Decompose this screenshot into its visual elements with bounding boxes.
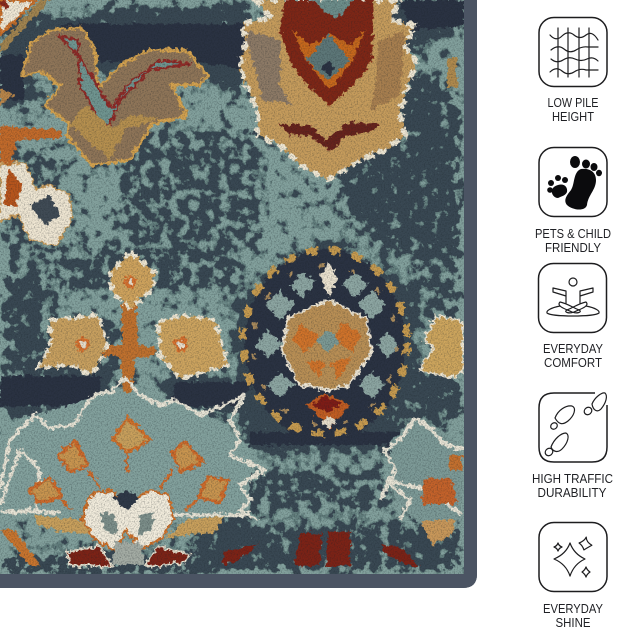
panel: pets and child friendly (535, 148, 611, 255)
motif: left orange stem and ivory flower (0, 88, 72, 246)
icon: low pile (539, 18, 607, 86)
label: FRIENDLY (545, 241, 602, 255)
label: DURABILITY (538, 486, 607, 500)
border stitching clean edge (0, 0, 477, 588)
motif: top left ivory corner (0, 0, 50, 55)
pale panel right lower (390, 420, 462, 525)
motif: central cross bloom (38, 252, 228, 392)
clean pale field bottom (0, 385, 255, 530)
rug pile grain (0, 0, 464, 574)
label: COMFORT (544, 356, 602, 370)
label: HEIGHT (552, 110, 594, 124)
icon: paw and foot prints (539, 148, 607, 216)
motif: right edge bloom (420, 316, 463, 378)
motif: small gold mark (447, 58, 458, 88)
motif: round medallion (243, 249, 407, 441)
motif: lower right orange bloom (420, 455, 462, 545)
panel: everyday shine (539, 522, 607, 630)
panel: rug photo (0, 0, 477, 588)
motif: bottom red blocks (222, 532, 418, 566)
solid navy patches (0, 0, 464, 445)
icon: seated meditation (538, 264, 606, 332)
panel: low pile height (539, 18, 607, 124)
panel: high traffic durability (532, 393, 613, 500)
motif: ivory zigzag outlines (0, 378, 464, 520)
rug border binding (0, 0, 477, 588)
motif: woven scroll (22, 28, 208, 165)
label: HIGH TRAFFIC (532, 472, 613, 486)
mottled mid tone (0, 0, 464, 574)
rug field (0, 0, 464, 574)
motif: top medallion (240, 0, 416, 180)
label: PETS & CHILD (535, 227, 611, 241)
label: EVERYDAY (543, 342, 604, 356)
label: SHINE (556, 616, 590, 630)
label: LOW PILE (548, 96, 598, 110)
panel: everyday comfort (538, 264, 606, 370)
motif: bottom heart bloom with leaves (0, 417, 228, 566)
mottled dark tone (0, 0, 464, 574)
label: EVERYDAY (543, 602, 604, 616)
icon: sparkles (539, 522, 607, 592)
icon: footprints (539, 393, 607, 462)
